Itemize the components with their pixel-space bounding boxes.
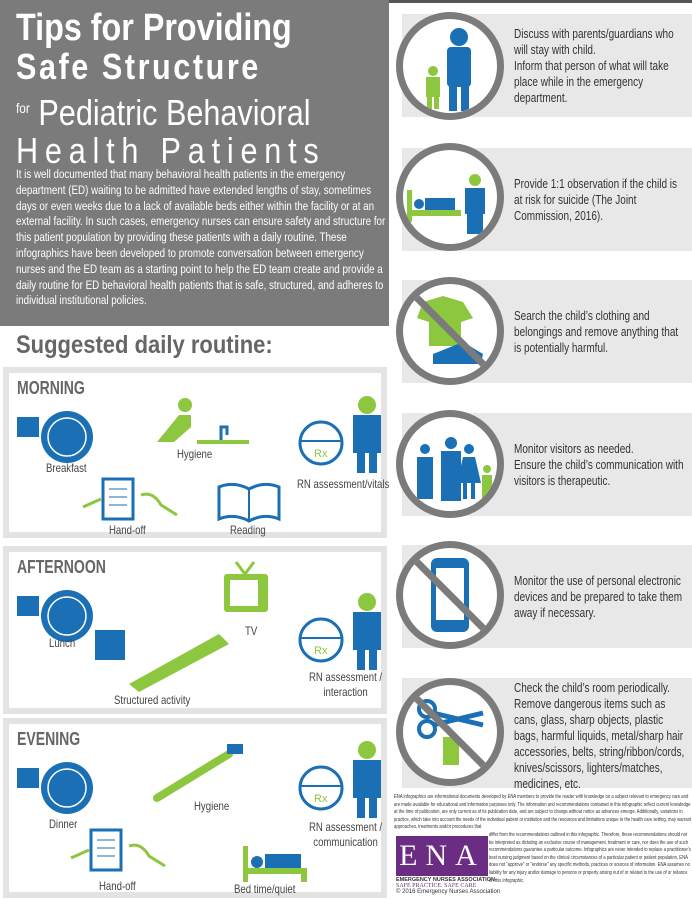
intro paragraph: It is well documented that many behavioral health patients in the emergency department (ED) waiting to be admitted have extended lengths of stay, sometimes days or even weeks due to a lack of available beds either within the facility or at an external facility. In such cases, emergency nurses can ensure safety and structure for this patient population by providing these patients with a daily routine. These infographics have been developed to promote conversation between emergency nurses and the ED team as a starting point to help the ED team create and provide a daily routine for ED behavioral health patients that is safe, structured, and adheres to individual institutional policies.: [16, 167, 385, 307]
title: [16, 7, 326, 171]
title: Health Patients: [16, 130, 326, 171]
icon: RN interaction: Rx: [314, 645, 328, 657]
icon: TV: [224, 561, 268, 612]
icon: reading: [218, 482, 280, 523]
tip 4: visitors: [402, 413, 692, 516]
panel: evening: Dinner: [49, 817, 77, 831]
panel: morning: [3, 367, 387, 538]
tip 4: visitors: Monitor visitors as needed.: [514, 441, 634, 456]
tip 1: parents: [402, 14, 692, 117]
panel: evening: RN assessment /: [309, 820, 382, 834]
icon: toothbrush: [153, 744, 243, 802]
panel: evening: Hand-off: [99, 879, 136, 893]
icon: RN interaction: [298, 593, 381, 670]
tip 4: visitors: Ensure the child’s communication with visitors is therapeutic.: [514, 457, 684, 488]
icon: RN assessment: Rx: [314, 448, 328, 460]
panel: afternoon: Structured activity: [114, 693, 190, 707]
panel: evening: communication: [313, 835, 378, 849]
panel: evening: EVENING: [17, 729, 80, 749]
disclaimer text: ENA infographics are informational documents developed by ENA members to provide the reader with knowledge on a subject relevant to emergency care and are made available for educational and information purposes only. The information and recommendations contained in this infographic reflect current knowledge at the time of publication, are only current as of its publication date, and are subject to change without notice as advances emerge. Additionally, variations in practice, which take into account the needs of the individual patient or institution and the resources and limitations unique to the health care setting, may warrant approaches, treatments and/or procedures that: [394, 794, 691, 830]
panel: afternoon: [3, 546, 387, 714]
icon: breakfast: [17, 411, 93, 463]
header panel: [0, 0, 389, 326]
panel: afternoon: TV: [245, 624, 257, 638]
icon: RN assessment: [298, 396, 381, 473]
tip 5: devices: Monitor the use of personal electronic devices and be prepared to take them away if necessary.: [514, 573, 682, 620]
panel: morning: Breakfast: [46, 461, 87, 475]
panel: evening: [3, 718, 387, 898]
icon: lunch: [17, 590, 93, 642]
panel: afternoon: interaction: [323, 685, 368, 699]
panel: evening: Bed time/quiet: [234, 882, 295, 896]
panel: afternoon: AFTERNOON: [17, 557, 106, 577]
logo: ENA: SAFE PRACTICE. SAFE CARE: [396, 883, 476, 889]
tip 5: devices: [402, 545, 692, 648]
panel: morning: Reading: [230, 523, 266, 537]
logo: ENA: EMERGENCY NURSES ASSOCIATION: [396, 877, 495, 883]
icon: RN communication: [298, 741, 381, 818]
panel: morning: Hand-off: [109, 523, 146, 537]
icon: RN communication: Rx: [314, 793, 328, 805]
tip 6: room check: [402, 678, 692, 788]
panel: morning: Hygiene: [177, 447, 212, 461]
panel: morning: MORNING: [17, 378, 85, 398]
panel: evening: Hygiene: [194, 799, 229, 813]
panel: morning: RN assessment/vitals: [297, 477, 389, 491]
tip 1: parents: Discuss with parents/guardians who will stay with child.: [514, 26, 674, 57]
icon: hygiene: [157, 398, 249, 444]
tip 3: search: Search the child’s clothing and belongings and remove anything that is potentially harmful.: [514, 308, 678, 355]
icon: hand-off: [70, 828, 166, 872]
logo: ENA: © 2016 Emergency Nurses Association: [396, 889, 500, 895]
text: differ from the recommendations outlined in this infographic. Therefore, these recommendations should not be interpreted as dictating an exclusive course of management, treatment or care, nor does the use of such recommendations guarantee a particular outcome. Infographics are never intended to replace a practitioner's best nursing judgment based on the clinical circumstances of a particular patient or patient population. ENA does not "approve" or "endorse" any specific methods, practices or sources of information. ENA assumes no liability for any injury and/or damage to persons or property arising out of or related to the use of or reliance on this infographic.: [489, 832, 691, 884]
title: for Pediatric Behavioral: [16, 92, 311, 133]
tip 2: observation: Provide 1:1 observation if the child is at risk for suicide (The Joint Commission, 2016).: [514, 176, 677, 223]
heading: suggested daily routine: Suggested daily routine:: [16, 331, 273, 359]
tip 3: search: [402, 280, 692, 383]
icon: structured activity: [95, 630, 229, 692]
icon: dinner: [17, 762, 93, 814]
icon: bed: [243, 846, 307, 882]
panel: afternoon: RN assessment /: [309, 670, 382, 684]
tip 2: observation: [402, 148, 692, 251]
logo: ENA: ENA: [399, 839, 485, 872]
tip 1: parents: Inform that person of what will take place while in the emergency department.: [514, 58, 669, 105]
panel: afternoon: Lunch: [49, 636, 75, 650]
title: Tips for Providing: [16, 7, 292, 49]
title: Safe Structure: [16, 46, 261, 87]
icon: hand-off: [82, 478, 178, 520]
logo: ENA: [396, 836, 500, 895]
tip 6: room check: Check the child’s room periodically. Remove dangerous items such as cans, glass, sharp objects, plastic bags, harmful liquids, metal/sharp hair accessories, belts, string/ribbon/cords, knives/scissors, lighters/matches, medicines, etc.: [514, 680, 684, 791]
